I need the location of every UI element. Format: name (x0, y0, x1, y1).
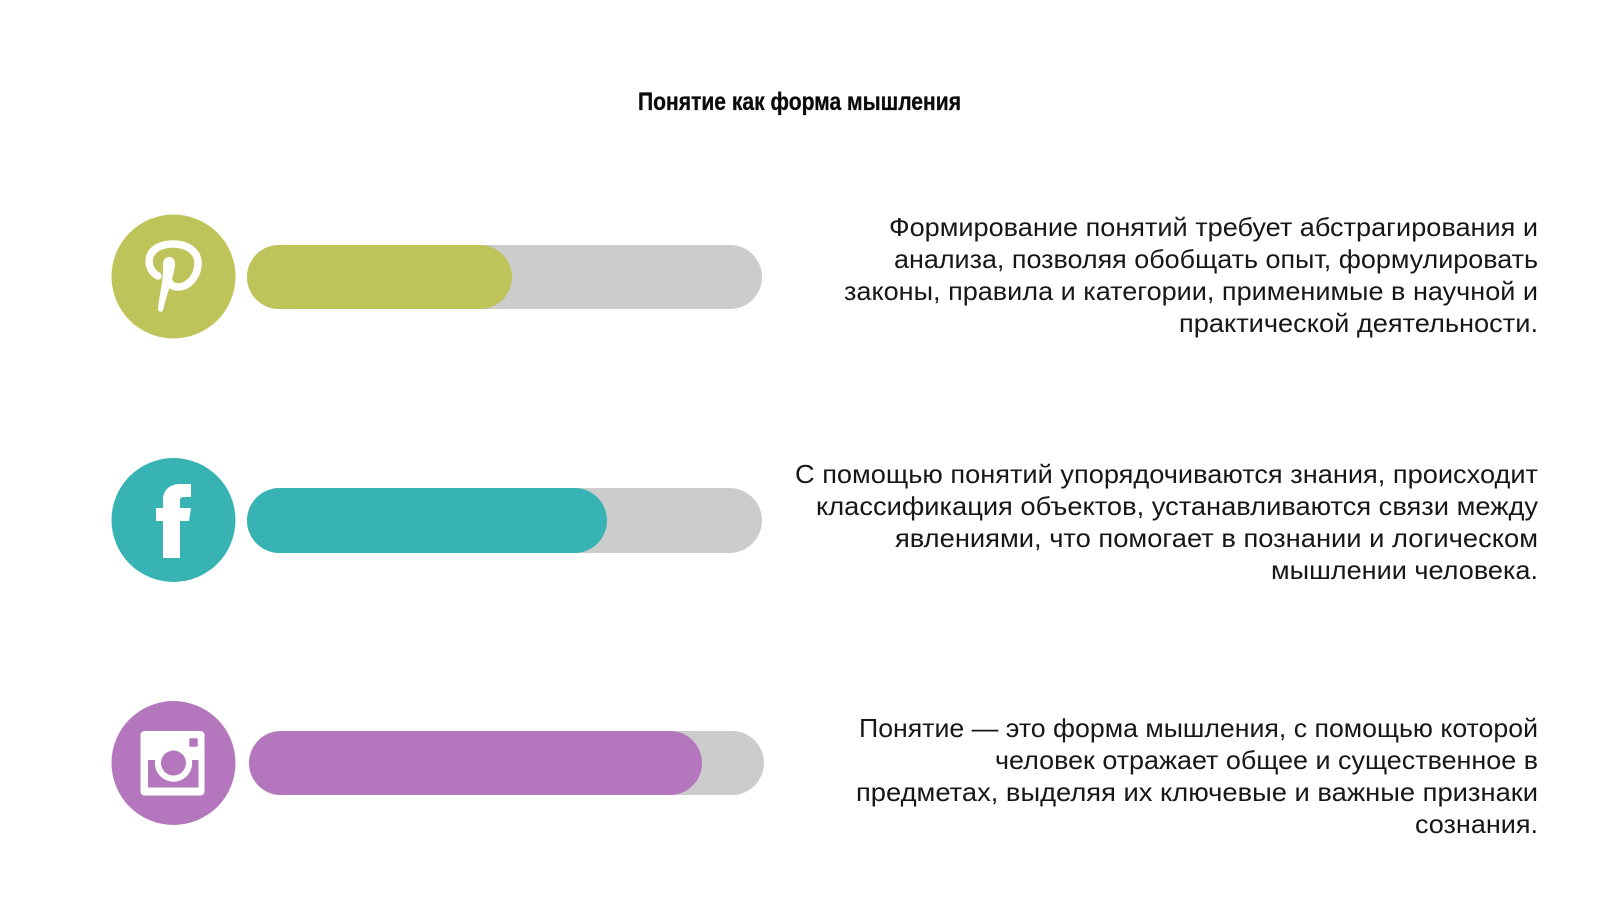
text block: row 2 (795, 459, 1538, 585)
text block: row 2: мышлении человека. (1271, 555, 1538, 585)
progress bar: instagram (249, 731, 764, 795)
text block: row 2: С помощью понятий упорядочиваются знания, происходит (795, 459, 1538, 489)
title: Понятие как форма мышления (638, 88, 961, 116)
text block: row 2: классификация объектов, устанавливаются связи между (816, 491, 1538, 521)
text block: row 3: предметах, выделяя их ключевые и важные признаки (856, 777, 1538, 807)
icon: facebook (112, 458, 236, 582)
icon: pinterest (112, 214, 236, 338)
text block: row 2: явлениями, что помогает в познании и логическом (895, 523, 1538, 553)
panel: row 1 pinterest (112, 212, 1538, 338)
panel: row 2 facebook (112, 458, 1538, 585)
progress bar: pinterest (247, 245, 762, 309)
text block: row 3: сознания. (1415, 809, 1538, 839)
progress bar: facebook (247, 488, 762, 553)
text block: row 3: человек отражает общее и существенное в (995, 745, 1538, 775)
text block: row 1 (844, 212, 1538, 338)
text block: row 1: анализа, позволяя обобщать опыт, формулировать (894, 244, 1538, 274)
text block: row 1: практической деятельности. (1179, 308, 1538, 338)
icon: instagram (112, 701, 236, 825)
text block: row 3: Понятие — это форма мышления, с помощью которой (859, 713, 1538, 743)
text block: row 1: Формирование понятий требует абстрагирования и (889, 212, 1538, 242)
text block: row 1: законы, правила и категории, применимые в научной и (844, 276, 1538, 306)
panel: row 3 instagram (112, 701, 1538, 839)
text block: row 3 (856, 713, 1538, 839)
